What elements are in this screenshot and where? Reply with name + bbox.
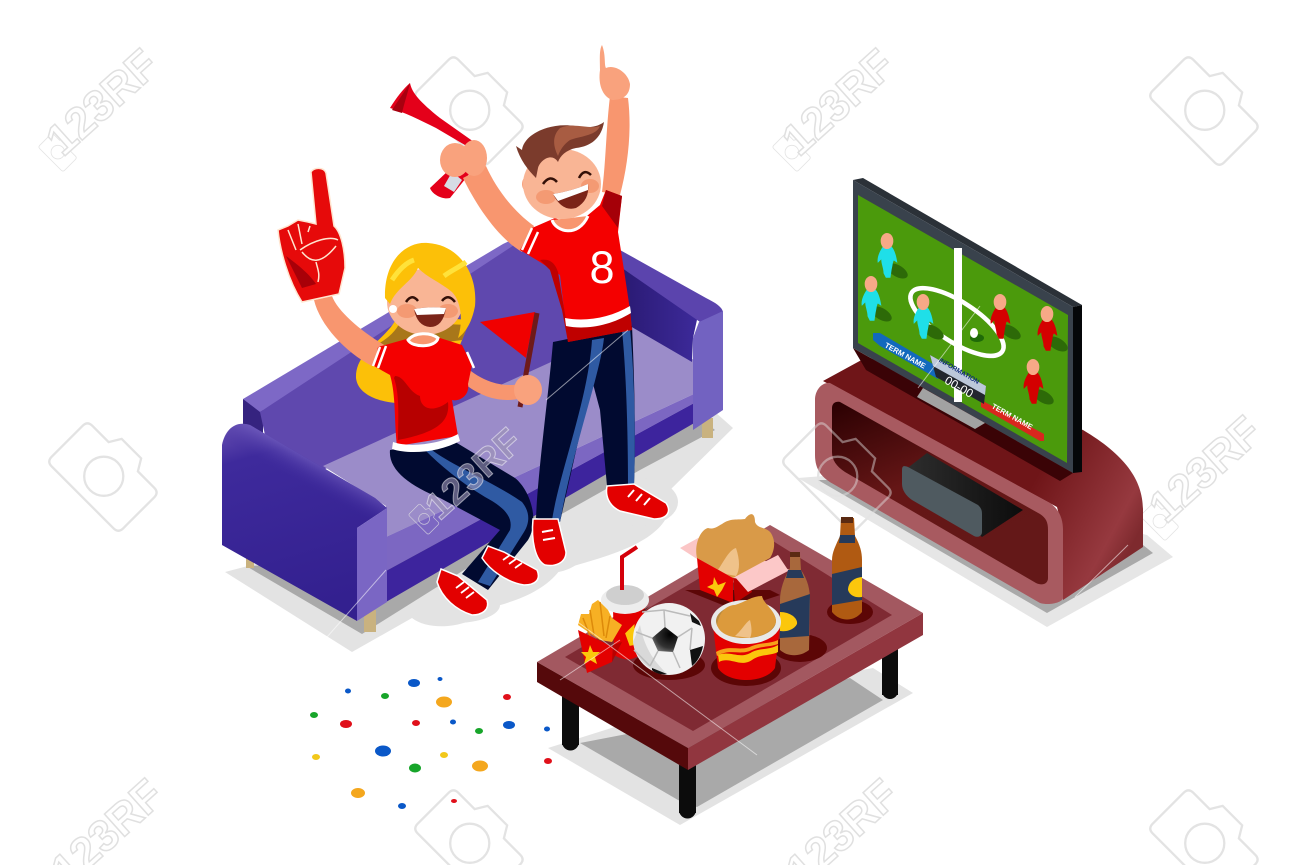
watermark text: 123RF xyxy=(773,40,904,165)
blue team bar xyxy=(873,333,938,379)
scoreboard: INFORMATION xyxy=(937,357,980,386)
scoreboard: 00-00 xyxy=(942,373,976,401)
red team players xyxy=(991,294,1070,408)
sofa xyxy=(222,226,723,632)
beer bottle 2 xyxy=(832,517,862,620)
console top and side body xyxy=(823,357,1143,600)
sofa left arm xyxy=(222,424,387,621)
media box xyxy=(902,453,1023,537)
watermark over artwork: 123RF xyxy=(418,421,530,528)
woman back hair xyxy=(356,315,470,403)
watermark logo over console xyxy=(781,413,901,533)
confetti xyxy=(310,677,552,809)
box star xyxy=(707,577,726,597)
sofa seat xyxy=(323,326,696,602)
soccer ball xyxy=(633,603,705,675)
coffee table xyxy=(537,525,923,818)
sofa feet xyxy=(246,418,713,632)
TV frame xyxy=(853,178,1082,307)
woman jeans xyxy=(390,440,533,590)
red team bar: TERM NAME xyxy=(990,402,1034,432)
woman hand with flag xyxy=(480,312,542,407)
console front frame xyxy=(815,383,1063,604)
floor shadow: sofa xyxy=(225,412,733,652)
man shoe laces xyxy=(542,490,650,540)
table left edge xyxy=(537,662,688,770)
blue team bar: TERM NAME xyxy=(883,341,927,371)
floor shadow: TV console xyxy=(798,470,1173,627)
table right edge xyxy=(688,613,923,770)
man vuvuzela xyxy=(390,83,482,198)
sofa right arm xyxy=(620,250,723,430)
table top rim xyxy=(537,525,923,748)
woman shoes xyxy=(437,546,538,615)
man trousers xyxy=(536,326,635,522)
red team bar xyxy=(981,400,1044,441)
pitch lines xyxy=(901,248,1013,402)
television xyxy=(853,178,1082,481)
woman hair shade xyxy=(364,322,468,372)
table top inner panel xyxy=(565,538,892,731)
woman raised arm xyxy=(314,296,386,366)
chicken bucket xyxy=(711,596,781,680)
man shoes xyxy=(532,484,669,565)
woman shoe laces xyxy=(456,555,522,598)
scoreboard xyxy=(930,355,986,404)
thin diagonal watermark lines xyxy=(320,306,1128,755)
watermark text: 123RF xyxy=(37,40,168,165)
man fan xyxy=(390,45,669,565)
woman torso xyxy=(373,334,474,452)
TV screen pitch xyxy=(858,195,1068,463)
table legs xyxy=(562,648,898,818)
cyan team players xyxy=(862,233,946,343)
soda cup xyxy=(601,547,649,659)
woman foam hand xyxy=(278,168,345,302)
french fries xyxy=(578,600,622,673)
TV console xyxy=(781,357,1143,604)
man head xyxy=(516,122,604,219)
man raised arm and hand xyxy=(600,45,630,195)
woman head xyxy=(385,243,475,338)
man left arm and hands xyxy=(440,140,534,252)
ball xyxy=(970,328,984,342)
woman fan xyxy=(278,168,542,615)
sofa backrest xyxy=(243,226,630,470)
TV stand xyxy=(917,388,985,429)
TV back shadow on console xyxy=(853,348,1073,481)
woman other arm xyxy=(460,366,522,400)
item shadows on table xyxy=(633,590,873,686)
man shirt xyxy=(520,190,632,342)
console opening xyxy=(832,402,1048,584)
fries box star xyxy=(581,645,600,664)
floor shadow: coffee table xyxy=(548,668,913,825)
beer bottle 1 xyxy=(780,552,810,655)
fried chicken box xyxy=(680,514,790,603)
shirt number: 8 xyxy=(589,242,615,293)
watermark text: 123RF xyxy=(1140,407,1271,532)
